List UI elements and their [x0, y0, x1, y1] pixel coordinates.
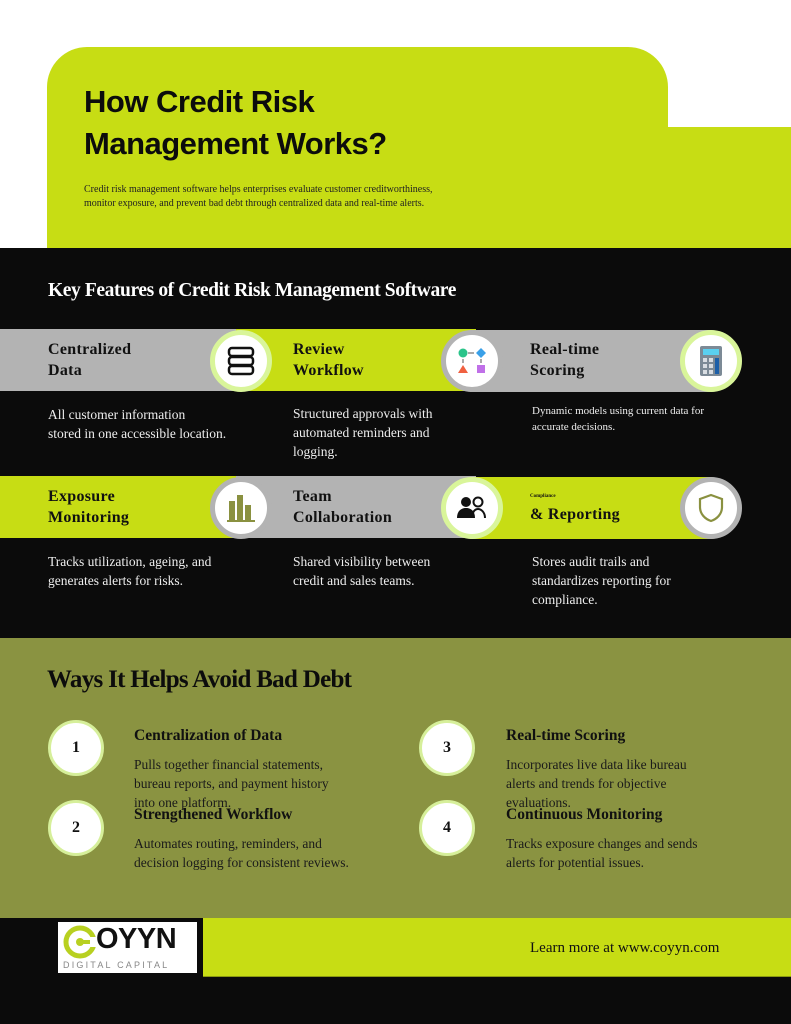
- features section: accurate decisions.: [532, 421, 615, 433]
- ways section: Real-time Scoring: [506, 727, 625, 744]
- item 3: [419, 720, 475, 776]
- logo: DIGITAL CAPITAL: [63, 960, 169, 970]
- title: [84, 84, 387, 161]
- features section: standardizes reporting for: [532, 573, 671, 588]
- features section: credit and sales teams.: [293, 573, 414, 588]
- features section: Dynamic models using current data for: [532, 405, 704, 417]
- ways section: Incorporates live data like bureau: [506, 757, 687, 772]
- features section: automated reminders and: [293, 425, 429, 440]
- icon: people: [441, 477, 503, 539]
- logo: [58, 922, 197, 973]
- footer link text: Learn more at www.coyyn.com: [530, 940, 719, 956]
- item 2: 2: [72, 819, 80, 836]
- features section: Shared visibility between: [293, 554, 430, 569]
- row 1 bands: [0, 329, 240, 391]
- ways section: evaluations.: [506, 795, 571, 810]
- feature: real-time scoring: Scoring: [530, 362, 585, 379]
- descriptions row 1: stored in one accessible location.: [48, 426, 226, 441]
- feature: review workflow: Review: [293, 341, 345, 358]
- title: How Credit Risk: [84, 84, 314, 119]
- features section: Stores audit trails and: [532, 554, 649, 569]
- descriptions row 1: [48, 407, 226, 441]
- item 4: 4: [443, 819, 451, 836]
- features section: Structured approvals with: [293, 406, 432, 421]
- features section: [0, 248, 791, 638]
- icon: calculator: [680, 330, 742, 392]
- descriptions row 2: generates alerts for risks.: [48, 573, 183, 588]
- item 3: 3: [443, 739, 451, 756]
- icon: shield: [680, 477, 742, 539]
- features section: compliance.: [532, 592, 598, 607]
- intro text: monitor exposure, and prevent bad debt through centralized data and real-time alerts.: [84, 198, 424, 209]
- ways section: alerts and trends for objective: [506, 776, 666, 791]
- intro text: Credit risk management software helps enterprises evaluate customer creditworthiness,: [84, 184, 432, 195]
- feature: centralized data: Data: [48, 362, 82, 379]
- ways section: bureau reports, and payment history: [134, 776, 329, 791]
- item 4: [419, 800, 475, 856]
- item 1: 1: [72, 739, 80, 756]
- ways section: alerts for potential issues.: [506, 855, 644, 870]
- feature: exposure monitoring: Exposure: [48, 488, 115, 505]
- ways section: [0, 638, 791, 918]
- icon: database: [210, 330, 272, 392]
- ways section: Continuous Monitoring: [506, 806, 662, 823]
- footer bar: [203, 918, 791, 977]
- ways section: into one platform.: [134, 795, 231, 810]
- descriptions row 2: Tracks utilization, ageing, and: [48, 554, 211, 569]
- features section: logging.: [293, 444, 338, 459]
- ways section: Automates routing, reminders, and: [134, 836, 322, 851]
- title: Management Works?: [84, 126, 387, 161]
- feature: review workflow: [293, 341, 364, 379]
- feature: real-time scoring: [530, 341, 599, 379]
- row 2 bands: [0, 476, 240, 538]
- intro text: [84, 184, 432, 209]
- ways section: decision logging for consistent reviews.: [134, 855, 349, 870]
- feature: real-time scoring: Real-time: [530, 341, 599, 358]
- feature: centralized data: Centralized: [48, 341, 131, 358]
- descriptions row 2: [48, 554, 212, 588]
- feature: compliance & reporting: Compliance: [530, 494, 556, 499]
- feature: team collaboration: Team: [293, 488, 332, 505]
- features section: & Reporting: [530, 506, 620, 523]
- feature: centralized data: [48, 341, 131, 379]
- feature: team collaboration: Collaboration: [293, 509, 392, 526]
- ways section: Centralization of Data: [134, 727, 282, 744]
- feature: team collaboration: [293, 488, 392, 526]
- ways section: Pulls together financial statements,: [134, 757, 323, 772]
- item 1: [48, 720, 104, 776]
- icon: workflow: [441, 330, 503, 392]
- ways section: Strengthened Workflow: [134, 806, 292, 823]
- descriptions row 1: All customer information: [48, 407, 185, 422]
- feature: review workflow: Workflow: [293, 362, 364, 379]
- icon: bar chart: [210, 477, 272, 539]
- item 2: [48, 800, 104, 856]
- footer: [0, 918, 791, 1024]
- logo: OYYN: [96, 923, 176, 955]
- features heading: Key Features of Credit Risk Management Software: [48, 280, 456, 301]
- ways heading: Ways It Helps Avoid Bad Debt: [47, 666, 351, 693]
- header panel: [47, 47, 791, 248]
- ways section: Tracks exposure changes and sends: [506, 836, 697, 851]
- feature: exposure monitoring: [48, 488, 129, 526]
- feature: exposure monitoring: Monitoring: [48, 509, 129, 526]
